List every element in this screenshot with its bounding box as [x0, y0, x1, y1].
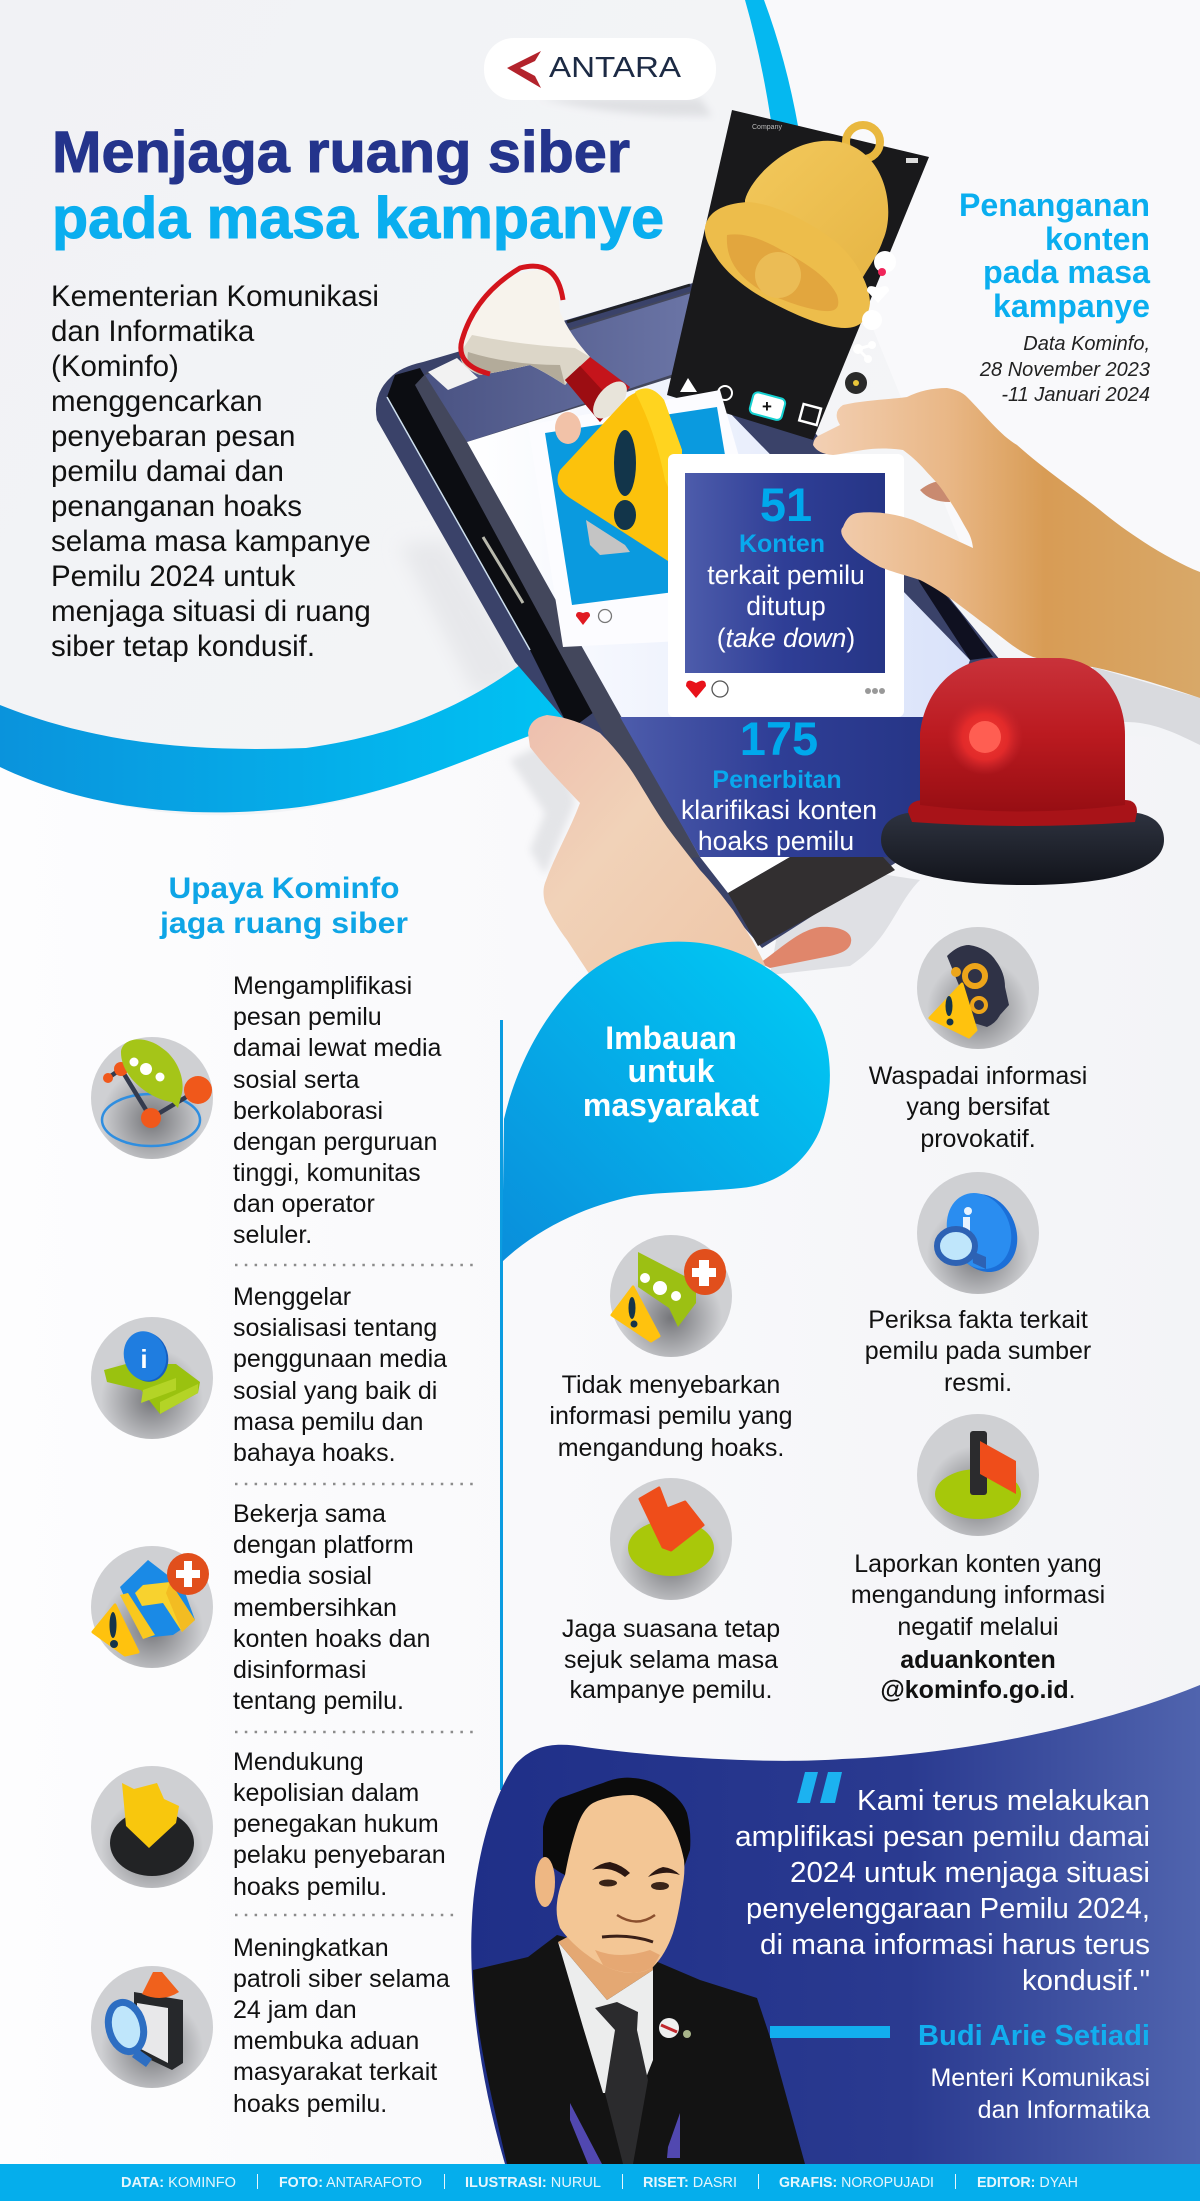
icon: bubble warning — [610, 1235, 732, 1357]
speaker name: Menteri Komunikasi — [930, 2064, 1150, 2092]
text: amplifikasi: berkolaborasi — [233, 1097, 383, 1125]
text: kepolisian: penegakan hukum — [233, 1810, 439, 1838]
name bar — [770, 2026, 890, 2038]
text: patroli: Meningkatkan — [233, 1934, 389, 1962]
quote — [735, 1772, 1150, 1997]
icon: megaphone — [460, 266, 633, 444]
intro text: selama masa kampanye — [51, 525, 371, 558]
speaker name — [918, 2020, 1150, 2124]
text: sosialisasi: masa pemilu dan — [233, 1408, 423, 1436]
mouth — [602, 1936, 653, 1942]
text: platform: Bekerja sama — [233, 1500, 386, 1528]
text: amplifikasi: seluler. — [233, 1221, 312, 1249]
status bar: Company — [752, 124, 782, 131]
text: tidak menyebarkan: informasi pemilu yang — [549, 1402, 793, 1430]
text: jaga suasana: kampanye pemilu. — [570, 1676, 772, 1704]
text: amplifikasi: dan operator — [233, 1190, 375, 1218]
phone with bell — [667, 110, 929, 440]
face — [557, 1795, 684, 1973]
text: kepolisian — [233, 1748, 446, 1901]
text: jaga suasana: Jaga suasana tetap — [562, 1615, 780, 1643]
text: platform: membersihkan — [233, 1594, 397, 1622]
quote: Kami terus melakukan — [857, 1785, 1150, 1817]
intro text: penyebaran pesan — [51, 420, 295, 453]
panel: 175 penerbitan: klarifikasi konten — [681, 795, 877, 825]
heading: penanganan konten: konten — [1045, 221, 1150, 257]
intro text: menggencarkan — [51, 385, 263, 418]
jaw shade — [595, 1950, 660, 1973]
text: platform — [233, 1500, 430, 1715]
icon: red flag — [917, 1414, 1039, 1536]
post card: 51 konten: (take down) — [717, 623, 855, 653]
tie — [595, 2002, 648, 2164]
hand top right — [813, 388, 1200, 698]
speaker name: Budi Arie Setiadi — [918, 2020, 1150, 2052]
ear — [535, 1857, 555, 1907]
panel: 175 penerbitan: hoaks pemilu — [698, 826, 854, 856]
quote: di mana informasi harus terus — [760, 1929, 1150, 1961]
suit — [473, 1935, 805, 2164]
icon: head with gears — [917, 927, 1039, 1049]
text: jaga suasana: sejuk selama masa — [564, 1646, 778, 1674]
text: kepolisian: hoaks pemilu. — [233, 1873, 387, 1901]
panel: imbauan blob: masyarakat — [583, 1087, 759, 1123]
heading: penanganan konten: Data Kominfo, — [1023, 333, 1150, 355]
text: sosialisasi — [233, 1283, 447, 1467]
icon: red siren — [881, 658, 1164, 885]
intro text: penanganan hoaks — [51, 490, 302, 523]
title — [52, 120, 664, 251]
intro text: dan Informatika — [51, 315, 255, 348]
post card: 51 konten: terkait pemilu — [707, 560, 865, 590]
icon: platform cleanup — [91, 1546, 213, 1668]
text: periksa — [865, 1306, 1091, 1397]
title: pada masa kampanye — [52, 186, 664, 251]
soft shadow beside tablet — [400, 540, 530, 695]
panel: 175 penerbitan: 175 — [740, 712, 818, 765]
text: laporkan: mengandung informasi — [851, 1581, 1105, 1609]
status bar — [752, 124, 918, 163]
soft shadow below wave — [510, 735, 575, 875]
text: laporkan — [851, 1550, 1105, 1704]
text: sosialisasi: bahaya hoaks. — [233, 1439, 396, 1467]
phone action icons: + — [762, 397, 772, 416]
text: kepolisian: kepolisian dalam — [233, 1779, 419, 1807]
text: amplifikasi: damai lewat media — [233, 1034, 442, 1062]
cyan wave left — [0, 650, 580, 812]
heading: penanganan konten: pada masa — [983, 254, 1150, 290]
quote: kondusif." — [1022, 1965, 1150, 1997]
footer credits: EDITOR: DYAH — [977, 2174, 1078, 2191]
eyes — [599, 1880, 669, 1890]
quote mark — [797, 1772, 842, 1803]
text: amplifikasi: sosial serta — [233, 1066, 360, 1094]
intro text — [51, 280, 379, 663]
icon: police badge — [91, 1766, 213, 1888]
panel: imbauan blob: Imbauan — [605, 1020, 737, 1056]
nose — [617, 1915, 655, 1922]
intro text: Pemilu 2024 untuk — [51, 560, 296, 593]
icon: network bubble — [91, 1037, 213, 1159]
text: waspadai — [869, 1062, 1087, 1153]
text: tidak menyebarkan: mengandung hoaks. — [558, 1434, 784, 1462]
text: sosialisasi: sosial yang baik di — [233, 1377, 437, 1405]
icon: thumb on green — [610, 1478, 732, 1600]
cyan arc top — [745, 0, 802, 150]
brows — [592, 1862, 680, 1877]
heading: upaya kominfo — [159, 872, 408, 940]
logo pill: ANTARA — [549, 52, 682, 84]
text: tidak menyebarkan: Tidak menyebarkan — [562, 1371, 780, 1399]
text: periksa: pemilu pada sumber — [865, 1337, 1091, 1365]
text: tidak menyebarkan — [549, 1371, 793, 1462]
quote: 2024 untuk menjaga situasi — [790, 1857, 1150, 1889]
icon: warning triangle — [558, 388, 682, 570]
tablet — [376, 283, 1000, 948]
post card: 51 konten — [668, 454, 904, 717]
panel: imbauan blob — [502, 942, 830, 1262]
portrait — [473, 1778, 805, 2164]
text: platform: dengan platform — [233, 1531, 414, 1559]
text: waspadai: provokatif. — [920, 1125, 1036, 1153]
heading: penanganan konten — [959, 187, 1150, 406]
soft shadow under tablet — [770, 860, 920, 975]
post card: 51 konten: 51 — [760, 478, 812, 531]
heading: penanganan konten: kampanye — [993, 288, 1150, 324]
post card: 51 konten: Konten — [739, 530, 825, 558]
text: platform: media sosial — [233, 1562, 372, 1590]
icon: info stack: i — [140, 1344, 148, 1374]
text: jaga suasana — [562, 1615, 780, 1704]
text: patroli: patroli siber selama — [233, 1965, 450, 1993]
panel: 175 penerbitan — [620, 712, 930, 857]
shirt — [558, 1942, 653, 2093]
footer credits: GRAFIS: NOROPUJADI — [779, 2174, 934, 2191]
text: amplifikasi: tinggi, komunitas — [233, 1159, 421, 1187]
quote: amplifikasi pesan pemilu damai — [735, 1821, 1150, 1853]
text: sosialisasi: sosialisasi tentang — [233, 1314, 437, 1342]
top right white swoosh — [764, 0, 1200, 640]
intro text: siber tetap kondusif. — [51, 630, 315, 663]
speaker name: dan Informatika — [978, 2096, 1150, 2124]
footer credits: RISET: DASRI — [643, 2174, 737, 2191]
text: amplifikasi: Mengamplifikasi — [233, 972, 412, 1000]
text: kepolisian: pelaku penyebaran — [233, 1841, 446, 1869]
intro text: menjaga situasi di ruang — [51, 595, 371, 628]
lapel pin — [659, 2018, 691, 2038]
text: patroli: membuka aduan — [233, 2027, 419, 2055]
logo pill — [484, 38, 716, 116]
neck — [558, 1925, 653, 2000]
text: periksa: resmi. — [944, 1369, 1012, 1397]
text: amplifikasi: dengan perguruan — [233, 1128, 437, 1156]
text: waspadai: Waspadai informasi — [869, 1062, 1087, 1090]
text: laporkan: negatif melalui — [897, 1613, 1059, 1641]
footer credits — [0, 2164, 1200, 2201]
text: amplifikasi: pesan pemilu — [233, 1003, 382, 1031]
title: Menjaga ruang siber — [52, 120, 630, 185]
footer credits: FOTO: ANTARAFOTO — [279, 2174, 422, 2191]
vertical divider — [500, 1020, 503, 1790]
intro text: (Kominfo) — [51, 350, 179, 383]
text: amplifikasi — [233, 972, 442, 1249]
text: waspadai: yang bersifat — [906, 1093, 1050, 1121]
footer credits: DATA: KOMINFO — [121, 2174, 236, 2191]
heading: upaya kominfo: Upaya Kominfo — [168, 872, 400, 905]
text: sosialisasi: penggunaan media — [233, 1345, 447, 1373]
phone action icons — [680, 251, 896, 425]
footer credits: ILUSTRASI: NURUL — [465, 2174, 601, 2191]
post card: 51 konten: ditutup — [746, 591, 826, 621]
text: platform: disinformasi — [233, 1656, 366, 1684]
text: periksa: Periksa fakta terkait — [868, 1306, 1088, 1334]
icon: bell — [705, 125, 888, 328]
panel: imbauan blob: untuk — [627, 1053, 715, 1089]
hand bottom left — [528, 715, 851, 990]
intro text: pemilu damai dan — [51, 455, 284, 488]
text: sosialisasi: Menggelar — [233, 1283, 351, 1311]
text: kepolisian: Mendukung — [233, 1748, 364, 1776]
back post card — [528, 390, 740, 647]
text: patroli — [233, 1934, 450, 2118]
quote: penyelenggaraan Pemilu 2024, — [746, 1893, 1150, 1925]
icon: patrol document — [91, 1966, 213, 2088]
panel: 175 penerbitan: Penerbitan — [712, 766, 842, 794]
icon: antara mark — [507, 51, 541, 88]
icon: info magnifier — [917, 1172, 1039, 1294]
text: patroli: hoaks pemilu. — [233, 2090, 387, 2118]
text: patroli: masyarakat terkait — [233, 2058, 437, 2086]
text: laporkan: Laporkan konten yang — [854, 1550, 1102, 1578]
text: platform: konten hoaks dan — [233, 1625, 430, 1653]
white lower background — [0, 700, 1200, 2164]
panel: quote background — [471, 1685, 1200, 2164]
text: laporkan: @kominfo.go.id. — [880, 1676, 1076, 1704]
text: patroli: 24 jam dan — [233, 1996, 357, 2024]
heading: penanganan konten: -11 Januari 2024 — [1001, 384, 1150, 406]
heading: penanganan konten: 28 November 2023 — [979, 359, 1150, 381]
soft shadow right of siren — [1090, 667, 1200, 745]
intro text: Kementerian Komunikasi — [51, 280, 379, 313]
text: platform: tentang pemilu. — [233, 1687, 404, 1715]
heading: penanganan konten: Penanganan — [959, 187, 1150, 223]
hair — [543, 1778, 690, 1875]
lanyard — [570, 2103, 680, 2164]
icon: info stack — [91, 1317, 213, 1439]
text: laporkan: aduankonten — [900, 1646, 1056, 1674]
heading: upaya kominfo: jaga ruang siber — [159, 907, 408, 940]
